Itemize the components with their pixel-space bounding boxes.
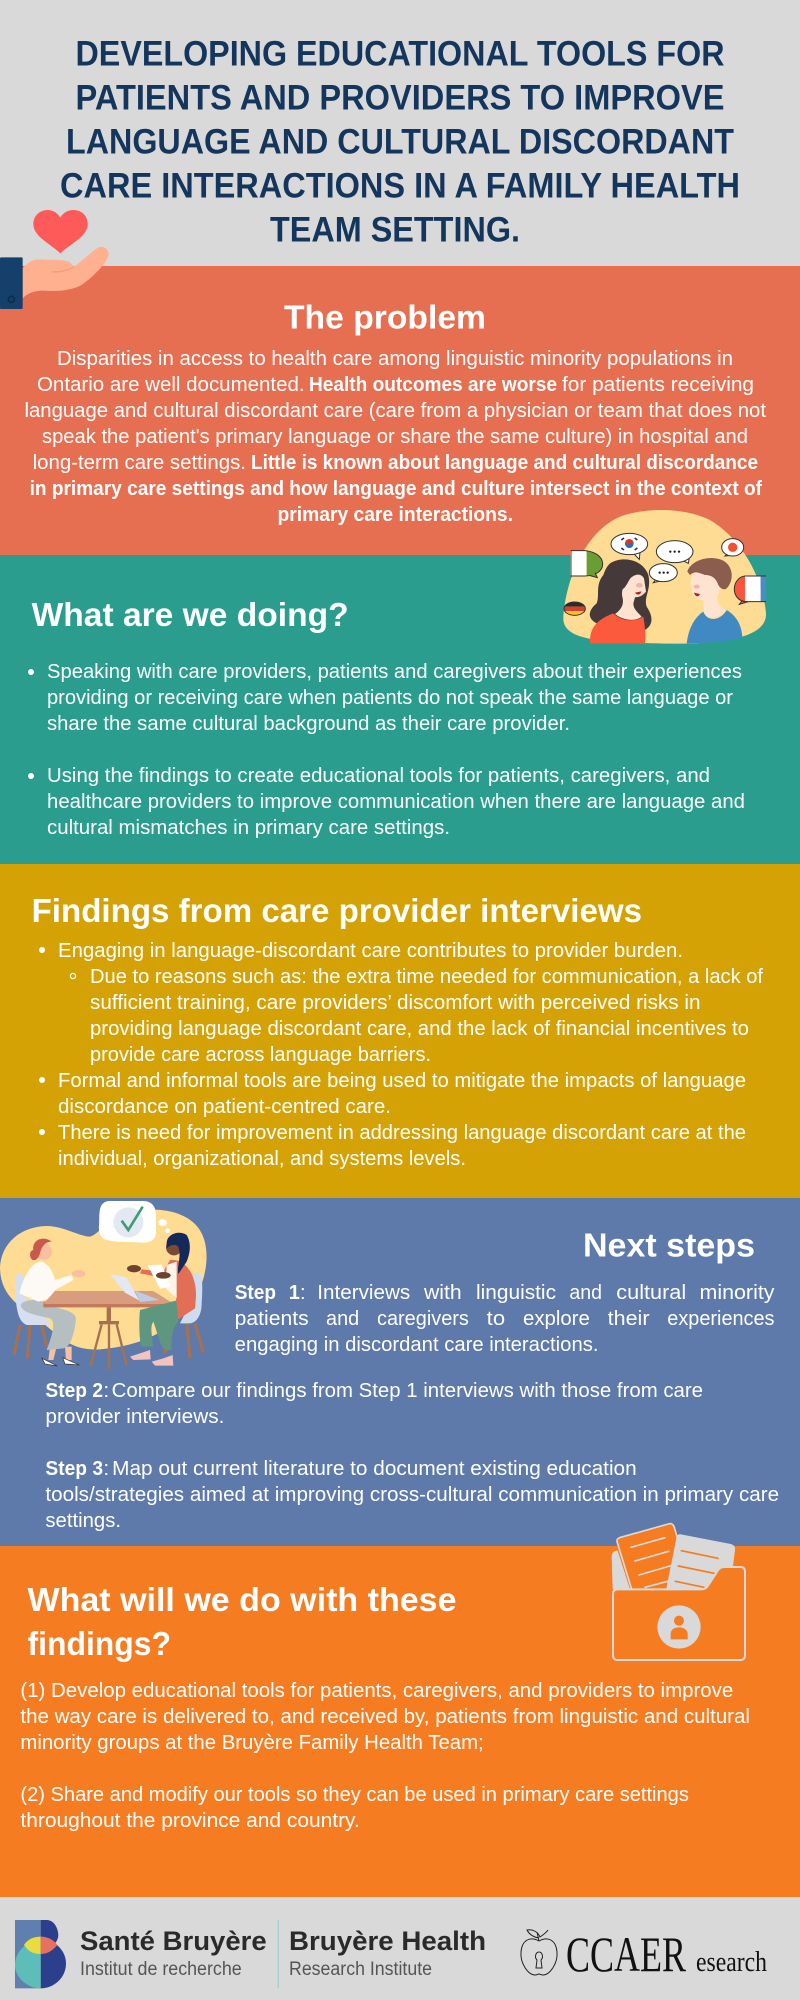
text block: step 1: patients bbox=[235, 1308, 309, 1330]
text block: problem description: Health outcomes are worse bbox=[309, 374, 557, 396]
icon: two women meeting at a table bbox=[0, 1201, 207, 1369]
text block: step 3: : bbox=[104, 1458, 109, 1480]
text block: improvement bullet: individual, organizational, and systems levels. bbox=[58, 1148, 466, 1170]
text block: problem description bbox=[24, 348, 766, 526]
text block: tools bullet: discordance on patient-centred care. bbox=[58, 1096, 391, 1118]
logo text: Santé Bruyère: Santé Bruyère bbox=[80, 1926, 267, 1956]
logo: Santé Bruyère mark bbox=[15, 1920, 66, 1988]
text block: step 1: cultural bbox=[616, 1282, 686, 1304]
text block: improvement bullet bbox=[39, 1122, 746, 1170]
text block: problem description: for patients receiving bbox=[562, 374, 754, 396]
text block: first bullet bbox=[28, 661, 742, 735]
text block: step 3: settings. bbox=[45, 1510, 121, 1532]
heading: what will we do: findings? bbox=[28, 1625, 171, 1662]
text block: step 1: engaging in discordant care interactions. bbox=[235, 1334, 598, 1356]
text block: step 2: : bbox=[104, 1380, 109, 1402]
text block: problem description: Ontario are well documented. bbox=[37, 374, 305, 396]
icon: hand holding heart bbox=[0, 210, 109, 309]
text block: improvement bullet: There is need for improvement in addressing language discordant care at the bbox=[58, 1122, 746, 1144]
text block: provider burden bullet: Engaging in language-discordant care contributes to provider burden. bbox=[58, 940, 683, 962]
text block: step 3: Map out current literature to document existing education bbox=[112, 1458, 637, 1480]
text block: problem description: long-term care settings. bbox=[33, 452, 246, 474]
text block: tools bullet bbox=[39, 1070, 746, 1118]
panel: next steps bbox=[0, 1198, 800, 1546]
text block: first plan: the way care is delivered to, and received by, patients from linguistic and cultural bbox=[20, 1706, 750, 1728]
text block: step 3: tools/strategies aimed at improving cross-cultural communication in primary care bbox=[45, 1484, 779, 1506]
text block: step 1: minority bbox=[700, 1282, 774, 1304]
text block: step 1: Step bbox=[235, 1282, 276, 1304]
text block: second plan bbox=[20, 1784, 689, 1832]
text block: step 2 bbox=[45, 1380, 703, 1428]
heading: what are we doing: What are we doing? bbox=[32, 596, 349, 633]
icon: folder with documents bbox=[612, 1524, 745, 1660]
logo text: Santé Bruyère bbox=[80, 1926, 267, 1980]
text block: problem description: in primary care settings and how language and culture intersect in the context of bbox=[30, 478, 762, 500]
text block: second bullet: healthcare providers to improve communication when there are language and bbox=[47, 791, 745, 813]
icon: two people talking with flag speech bubbles bbox=[563, 510, 767, 644]
text block: step 2: Step 2 bbox=[45, 1380, 103, 1402]
heading: findings: Findings from care provider interviews bbox=[32, 892, 642, 929]
logo text: Bruyère Health bbox=[289, 1926, 486, 1980]
text block: step 2: Compare our findings from Step 1 interviews with those from care bbox=[112, 1380, 703, 1402]
text block: problem description: primary care interactions. bbox=[278, 504, 513, 526]
text block: problem description: Disparities in access to health care among linguistic minority populations in bbox=[57, 348, 733, 370]
text block: step 1: caregivers bbox=[377, 1308, 469, 1330]
text block: step 1: linguistic bbox=[476, 1282, 556, 1304]
logo text: Bruyère Health: Research Institute bbox=[289, 1959, 432, 1980]
text block: first plan: minority groups at the Bruyère Family Health Team; bbox=[20, 1732, 484, 1754]
panel: footer with logos bbox=[0, 1897, 800, 2000]
panel: the problem bbox=[0, 266, 800, 555]
text block: step 1 bbox=[235, 1282, 774, 1356]
text block: step 3 bbox=[45, 1458, 779, 1532]
text block: first bullet: share the same cultural background as their care provider. bbox=[47, 713, 570, 735]
title: CARE INTERACTIONS IN A FAMILY HEALTH bbox=[60, 166, 740, 206]
title: DEVELOPING EDUCATIONAL TOOLS FOR bbox=[76, 34, 724, 74]
text block: step 3: Step 3 bbox=[45, 1458, 103, 1480]
text block: second plan: throughout the province and country. bbox=[20, 1810, 360, 1832]
text block: provider burden bullet: Due to reasons such as: the extra time needed for communication, a lack of bbox=[90, 966, 763, 988]
panel: title header bbox=[0, 0, 800, 266]
text block: first bullet: Speaking with care providers, patients and caregivers about their experiences bbox=[47, 661, 742, 683]
text block: first plan bbox=[20, 1680, 750, 1754]
text block: second bullet: Using the findings to create educational tools for patients, caregivers, and bbox=[47, 765, 710, 787]
text block: step 1: their bbox=[608, 1308, 650, 1330]
text block: step 1: experiences bbox=[667, 1308, 774, 1330]
text block: step 2: provider interviews. bbox=[45, 1406, 224, 1428]
heading: the problem: The problem bbox=[284, 298, 486, 336]
logo text: Bruyère Health: Bruyère Health bbox=[289, 1926, 486, 1956]
title bbox=[60, 34, 740, 250]
text block: step 1: Interviews bbox=[317, 1282, 410, 1304]
panel: findings from care provider interviews bbox=[0, 864, 800, 1198]
text block: second bullet: cultural mismatches in primary care settings. bbox=[47, 817, 450, 839]
text block: problem description: language and cultural discordant care (care from a physician or team that does not bbox=[24, 400, 766, 422]
logo text: CCAER research: esearch bbox=[696, 1947, 767, 1978]
text block: provider burden bullet: providing language discordant care, and the lack of financial incentives to bbox=[90, 1018, 749, 1040]
text block: first plan: (1) Develop educational tools for patients, caregivers, and providers to improve bbox=[20, 1680, 733, 1702]
panel: what are we doing bbox=[0, 555, 800, 864]
title: TEAM SETTING. bbox=[270, 210, 520, 250]
text block: provider burden bullet: provide care across language barriers. bbox=[90, 1044, 431, 1066]
title: LANGUAGE AND CULTURAL DISCORDANT bbox=[66, 122, 734, 162]
text block: provider burden bullet: sufficient training, care providers’ discomfort with perceived risks in bbox=[90, 992, 700, 1014]
panel: what will we do with these findings bbox=[0, 1546, 800, 1897]
logo text: CCAER research: CCAER bbox=[566, 1926, 686, 1982]
text block: problem description: Little is known about language and cultural discordance bbox=[251, 452, 758, 474]
text block: step 1: and bbox=[326, 1308, 359, 1330]
text block: second bullet bbox=[28, 765, 745, 839]
logo text: Santé Bruyère: Institut de recherche bbox=[80, 1959, 242, 1980]
text block: provider burden bullet bbox=[39, 940, 763, 1066]
heading: next steps: Next steps bbox=[583, 1226, 755, 1264]
text block: step 1: to bbox=[487, 1308, 505, 1330]
text block: step 1: 1 bbox=[289, 1282, 300, 1304]
title: PATIENTS AND PROVIDERS TO IMPROVE bbox=[76, 78, 724, 118]
heading: what will we do bbox=[28, 1581, 456, 1662]
text block: step 1: with bbox=[423, 1282, 462, 1304]
logo: apple with keyhole bbox=[521, 1930, 557, 1975]
text block: problem description: speak the patient's primary language or share the same culture) in hospital and bbox=[42, 426, 748, 448]
text block: tools bullet: Formal and informal tools are being used to mitigate the impacts of language bbox=[58, 1070, 746, 1092]
text block: second plan: (2) Share and modify our tools so they can be used in primary care settings bbox=[20, 1784, 689, 1806]
heading: what will we do: What will we do with these bbox=[28, 1581, 456, 1618]
text block: step 1: and bbox=[569, 1282, 602, 1304]
text block: step 1: explore bbox=[523, 1308, 590, 1330]
text block: step 1: : bbox=[300, 1282, 306, 1304]
text block: first bullet: providing or receiving care when patients do not speak the same language or bbox=[47, 687, 733, 709]
